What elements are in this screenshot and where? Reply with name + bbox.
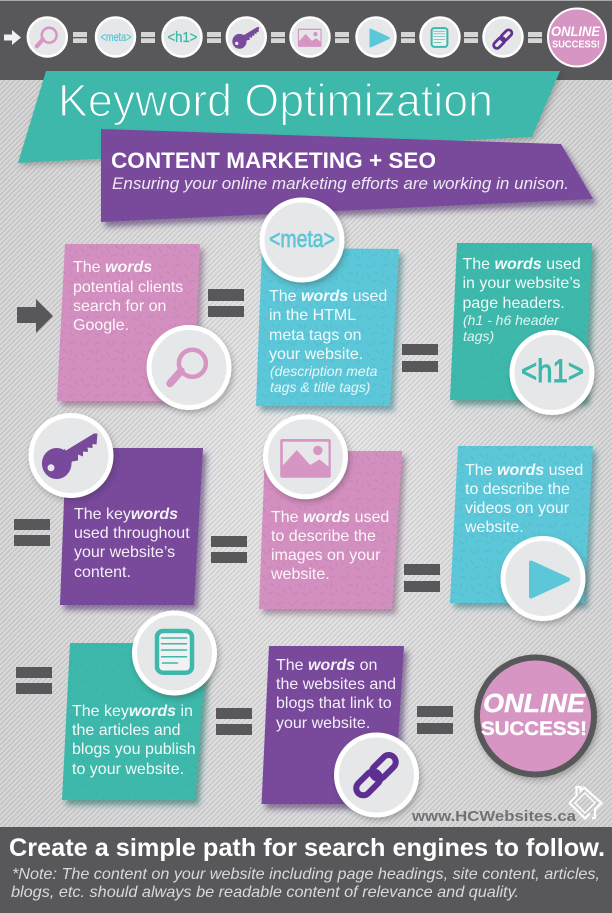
text: meta words: meta tags on xyxy=(269,327,362,344)
text: video words: to describe the xyxy=(465,481,570,498)
icon: h1 tag: <h1> xyxy=(521,353,584,389)
text: image words: to describe the xyxy=(271,528,376,545)
title text: Keyword Optimization xyxy=(58,75,493,126)
icon: document xyxy=(420,18,460,56)
equals xyxy=(404,564,440,592)
text: meta words: The words used xyxy=(269,288,387,305)
text: keywords in content: your website’s xyxy=(74,544,175,561)
text: search words: potential clients xyxy=(73,279,183,296)
equals 4 xyxy=(271,32,285,43)
equals 1 xyxy=(73,32,87,43)
text: keywords in content: The keywords xyxy=(74,506,178,523)
text: meta note: (description meta xyxy=(270,363,378,379)
subtitle heading: CONTENT MARKETING + SEO xyxy=(111,148,436,173)
panel: header words xyxy=(450,243,592,412)
text: header note: (h1 - h6 header xyxy=(463,312,560,328)
title banner xyxy=(18,71,560,163)
website url: www.HCWebsites.ca xyxy=(411,808,577,825)
badge: online success: SUCCESS! xyxy=(481,718,587,740)
panel: video words xyxy=(450,446,593,618)
text: image words: images on your xyxy=(271,547,381,564)
panel: search words xyxy=(57,244,229,408)
equals 6 xyxy=(401,32,415,43)
equals 7 xyxy=(464,32,478,43)
text: meta note: tags & title tags) xyxy=(270,379,370,395)
equals 3 xyxy=(207,32,221,43)
text: image words: website. xyxy=(270,566,330,583)
footer note: blogs, etc. should always be readable content of relevance and quality. xyxy=(11,884,519,901)
icon: search xyxy=(28,18,67,56)
text: article keywords: the articles and xyxy=(72,722,181,739)
badge: online success xyxy=(477,658,594,774)
text: header words: page headers. xyxy=(462,295,565,312)
text: backlink words: the websites and xyxy=(276,676,396,693)
text: article keywords: to your website. xyxy=(72,761,184,778)
icon: h1 tag xyxy=(512,332,592,412)
icon: image xyxy=(290,18,330,56)
footer note: *Note: The content on your website including page headings, site content, articles, xyxy=(12,866,600,883)
icon: logo xyxy=(570,787,602,818)
equals xyxy=(402,344,438,372)
arrow: row one start xyxy=(17,299,53,333)
icon: document xyxy=(134,613,214,693)
text: header note: tags) xyxy=(463,328,494,344)
icon: key xyxy=(227,18,266,56)
panel: backlink words xyxy=(262,646,416,815)
text: meta words: in the HTML xyxy=(269,307,356,324)
text: meta words: your website. xyxy=(269,346,363,363)
icon: picture xyxy=(266,417,346,497)
text: search words: search for on xyxy=(73,298,166,315)
badge: online success small: SUCCESS! xyxy=(552,40,600,50)
text: keywords in content: used throughout xyxy=(74,525,190,542)
equals xyxy=(16,667,52,694)
subtitle tagline: Ensuring your online marketing efforts are working in unison. xyxy=(112,174,569,193)
footer heading: Create a simple path for search engines to follow. xyxy=(9,834,605,862)
equals xyxy=(14,519,50,546)
subtitle banner xyxy=(101,129,593,222)
equals xyxy=(211,536,247,563)
icon: link xyxy=(484,18,522,56)
panel: keywords in content xyxy=(31,416,203,605)
panel: image words xyxy=(259,417,402,609)
icon: h1: <h1> xyxy=(168,29,198,46)
icon: magnifier xyxy=(149,328,229,408)
text: article keywords: The keywords in xyxy=(72,703,193,720)
icon: chain link xyxy=(336,735,416,815)
panel: article keywords xyxy=(62,613,214,800)
text: backlink words: The words on xyxy=(276,657,377,674)
text: video words: videos on your xyxy=(465,500,570,517)
icon: meta: <meta> xyxy=(100,30,132,44)
icon: meta tag: <meta> xyxy=(269,226,335,253)
icon: h1 xyxy=(162,18,202,56)
badge: online success small xyxy=(548,8,606,66)
text: video words: website. xyxy=(464,519,524,536)
equals xyxy=(417,706,453,734)
icon: play xyxy=(356,18,396,56)
text: search words: Google. xyxy=(73,317,129,334)
icon: meta xyxy=(96,18,135,56)
badge: online success small: ONLINE xyxy=(551,24,601,39)
badge: online success: ONLINE xyxy=(483,688,586,718)
text: keywords in content: content. xyxy=(74,564,131,581)
equals 5 xyxy=(335,32,349,43)
arrow: start xyxy=(4,30,21,45)
equals xyxy=(216,708,252,735)
icon: meta tag xyxy=(262,200,342,280)
text: article keywords: blogs you publish xyxy=(72,741,196,758)
panel: meta words xyxy=(256,200,399,406)
text: image words: The words used xyxy=(271,509,389,526)
equals xyxy=(208,289,244,317)
text: video words: The words used xyxy=(465,462,583,479)
text: header words: in your website’s xyxy=(462,275,580,292)
equals 2 xyxy=(141,32,155,43)
text: search words: The words xyxy=(73,259,152,276)
text: backlink words: your website. xyxy=(276,715,370,732)
icon: play xyxy=(503,538,583,618)
text: backlink words: blogs that link to xyxy=(276,695,392,712)
top icon bar xyxy=(0,0,612,80)
text: header words: The words used xyxy=(462,256,581,273)
footer bar xyxy=(0,827,612,913)
equals 8 xyxy=(528,32,542,43)
icon: key xyxy=(31,416,111,496)
